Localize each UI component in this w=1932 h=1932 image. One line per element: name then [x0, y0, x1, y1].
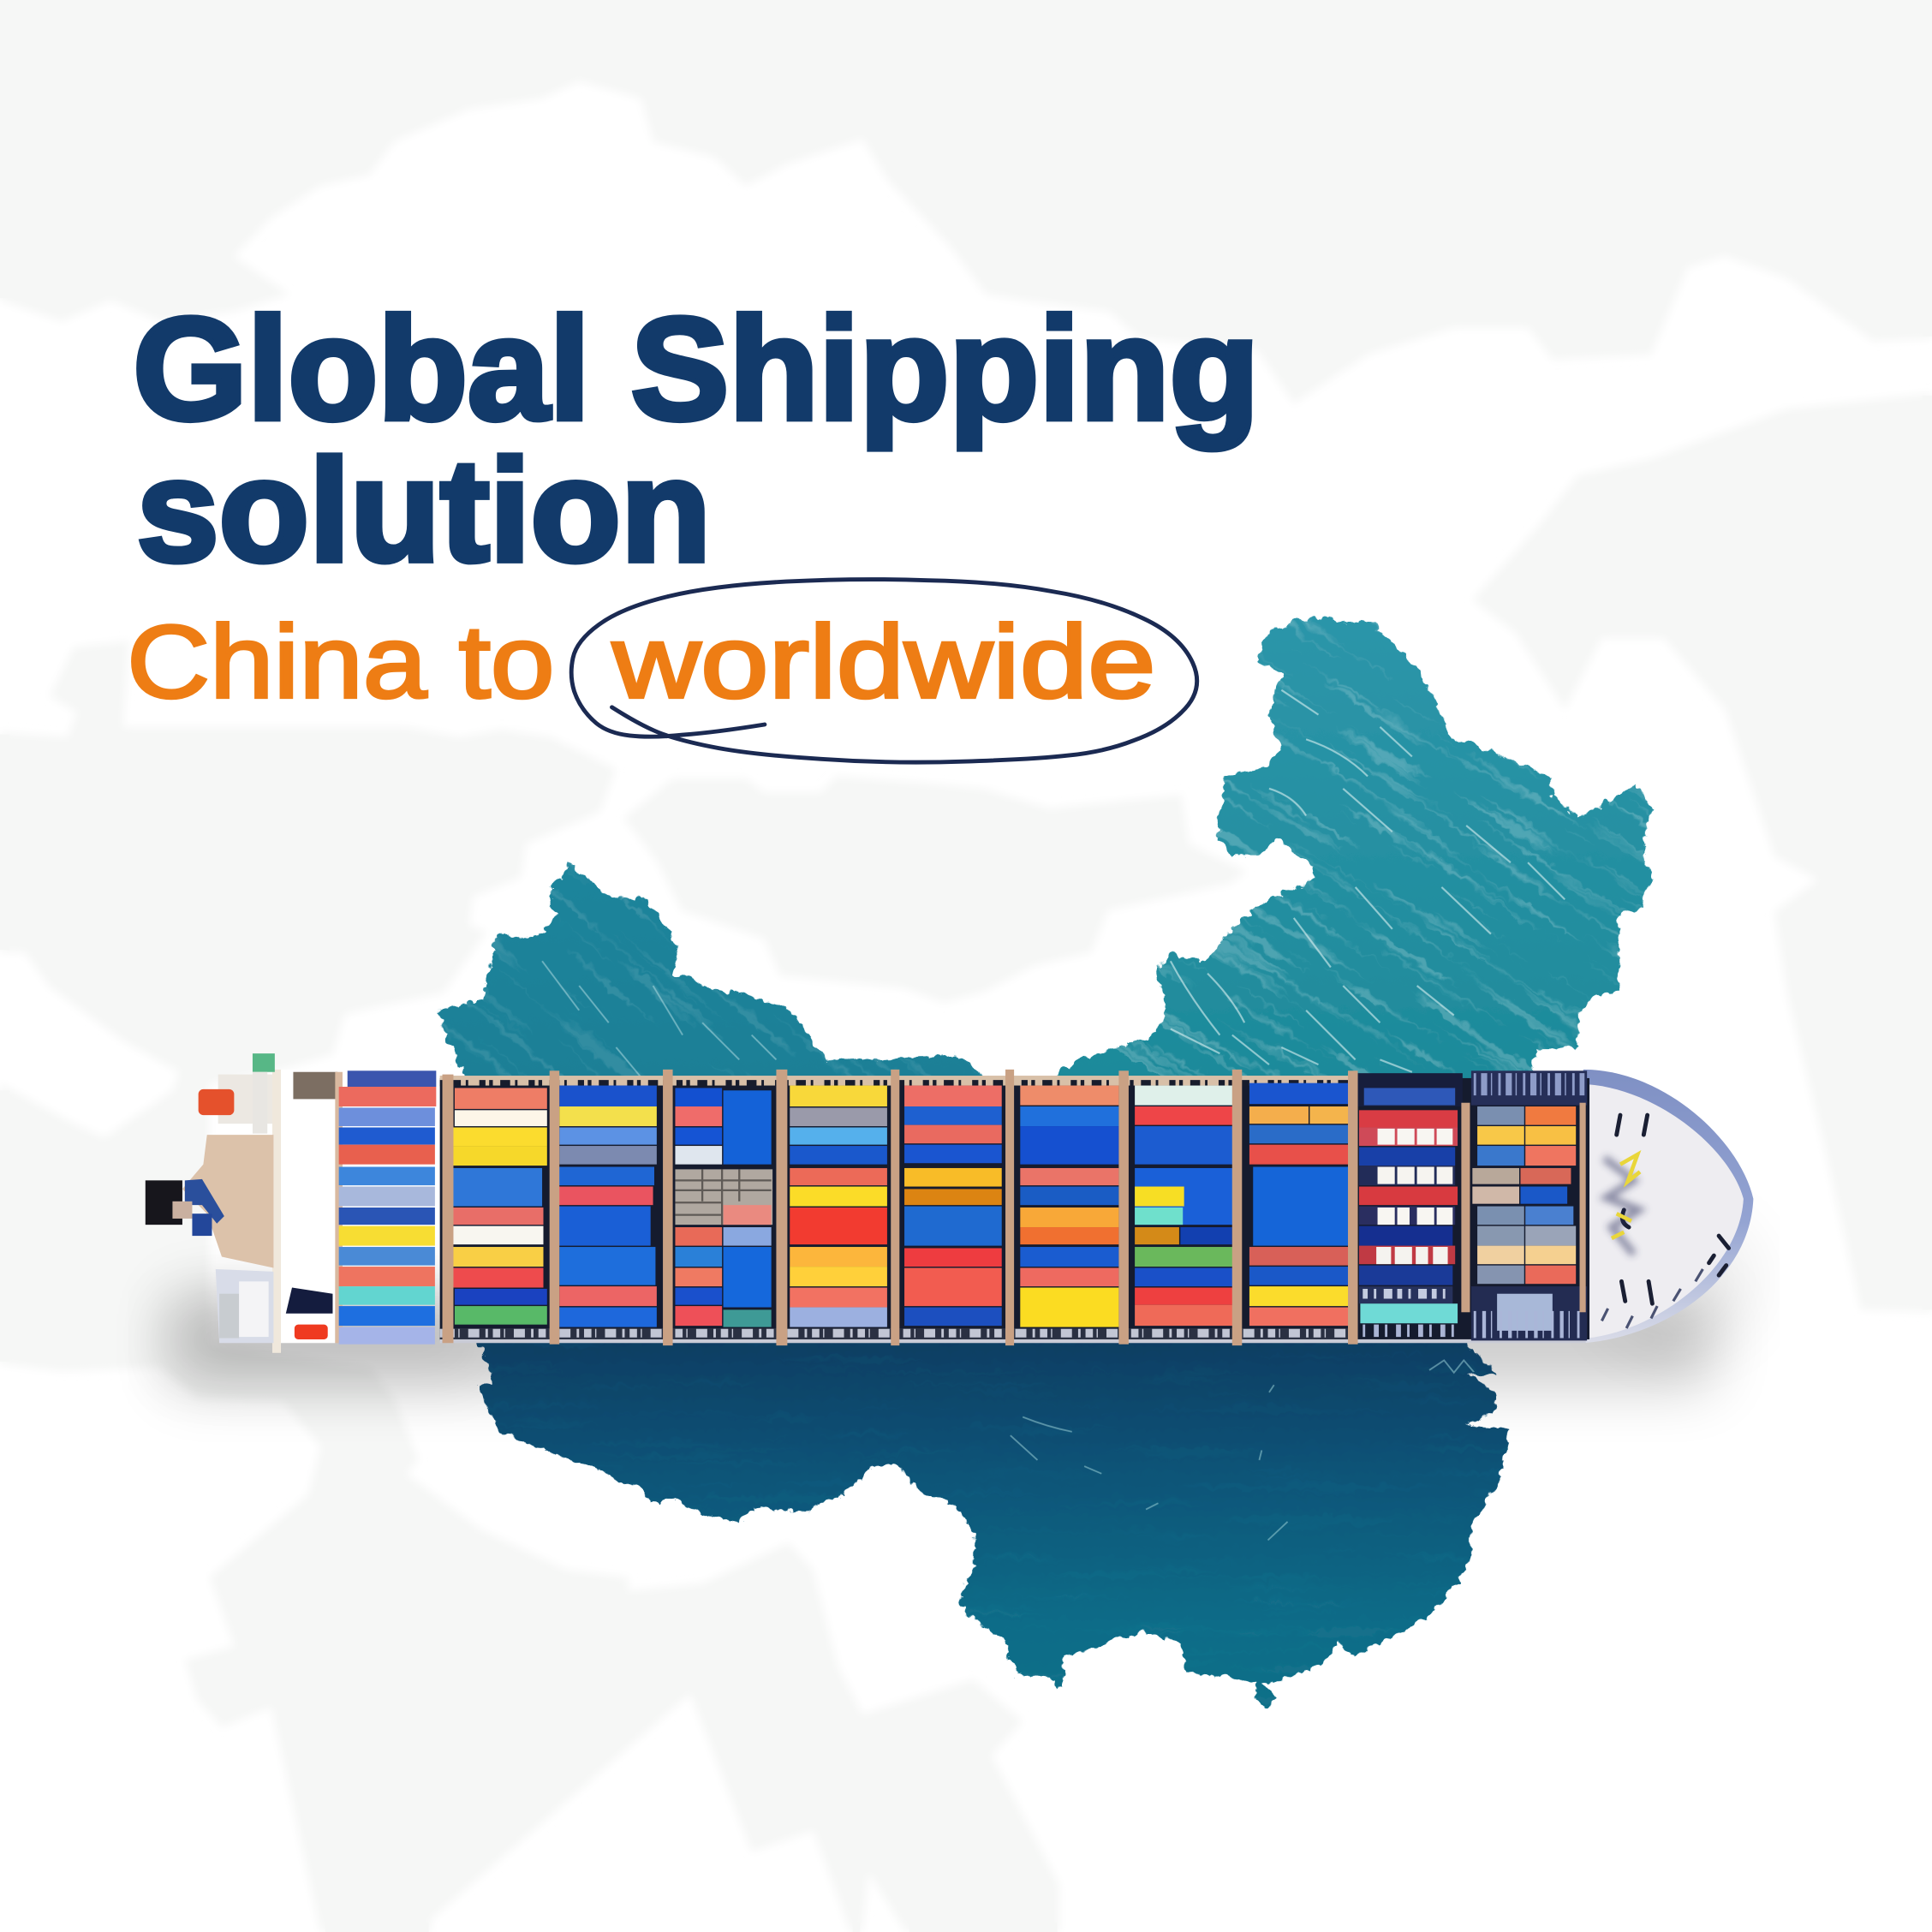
- wave highlights south: [1011, 1360, 1479, 1540]
- green mast top: [253, 1053, 275, 1072]
- deck base: [440, 1078, 1589, 1339]
- blue and white funnel stripes: [185, 1179, 224, 1224]
- bay 11 containers: [1471, 1070, 1587, 1340]
- bay 9 containers: [1249, 1083, 1349, 1326]
- open grey bay: [675, 1169, 772, 1225]
- title: [133, 287, 1259, 592]
- map lobe: north-east: [1057, 615, 1655, 1078]
- map fill with jagged coast: [437, 615, 1655, 1709]
- deck edge top: [440, 1076, 1358, 1086]
- ship bow hull: [1583, 1070, 1753, 1343]
- bay 3 containers: [554, 1086, 657, 1327]
- bay 1 containers: [339, 1070, 436, 1345]
- red lifeboat lower: [295, 1325, 328, 1339]
- subtitle worldwide: worldwide: [611, 604, 1156, 719]
- map lobe: south: [468, 1331, 1528, 1713]
- stern deck clutter: [293, 1072, 337, 1099]
- lower stern block: [216, 1269, 273, 1343]
- bay 5 containers: [790, 1086, 887, 1327]
- navy deck block: [286, 1288, 332, 1314]
- bow deck markings: [1617, 1115, 1729, 1303]
- black funnel: [146, 1180, 182, 1225]
- red lifeboat: [199, 1089, 234, 1115]
- container ship: [146, 1053, 1753, 1353]
- map region: northern band: [0, 0, 1932, 404]
- funnel mast: [272, 1070, 281, 1353]
- China map filled with ocean texture: [437, 615, 1655, 1709]
- map region: eastern land: [1472, 393, 1932, 1312]
- white container tops row 1: [1378, 1129, 1452, 1145]
- white container tops row 4: [1376, 1247, 1448, 1264]
- bay 4 containers: [675, 1088, 772, 1327]
- map lobe: north-west: [437, 862, 983, 1076]
- subtitle: [127, 604, 1156, 719]
- white container tops row 3: [1378, 1208, 1452, 1225]
- ship shadow: [160, 1208, 1762, 1386]
- bay 10 containers: [1358, 1073, 1463, 1331]
- map region: central land: [623, 776, 1247, 1003]
- deck edge bottom: [440, 1328, 1586, 1343]
- title line 2: solution: [137, 429, 711, 592]
- wave highlights north-west: [542, 961, 776, 1076]
- hatch pillars: [443, 1070, 1586, 1345]
- subtitle China to: China to: [127, 604, 554, 719]
- white accommodation block: [276, 1070, 335, 1343]
- stern superstructure: [146, 1053, 343, 1353]
- bay 6 containers: [904, 1086, 1002, 1326]
- map region: western land: [0, 641, 1059, 1932]
- wave highlights north-east: [1171, 690, 1565, 1072]
- upper bridge wing: [218, 1075, 272, 1124]
- bay 7 containers: [1020, 1086, 1118, 1327]
- bay 2 containers: [444, 1088, 547, 1325]
- white container tops row 2: [1378, 1167, 1452, 1184]
- hand-drawn ellipse around worldwide: [571, 580, 1197, 762]
- title line 1: Global Shipping: [133, 287, 1259, 450]
- tan stern deck: [182, 1135, 273, 1267]
- bay 8 containers: [1135, 1086, 1233, 1326]
